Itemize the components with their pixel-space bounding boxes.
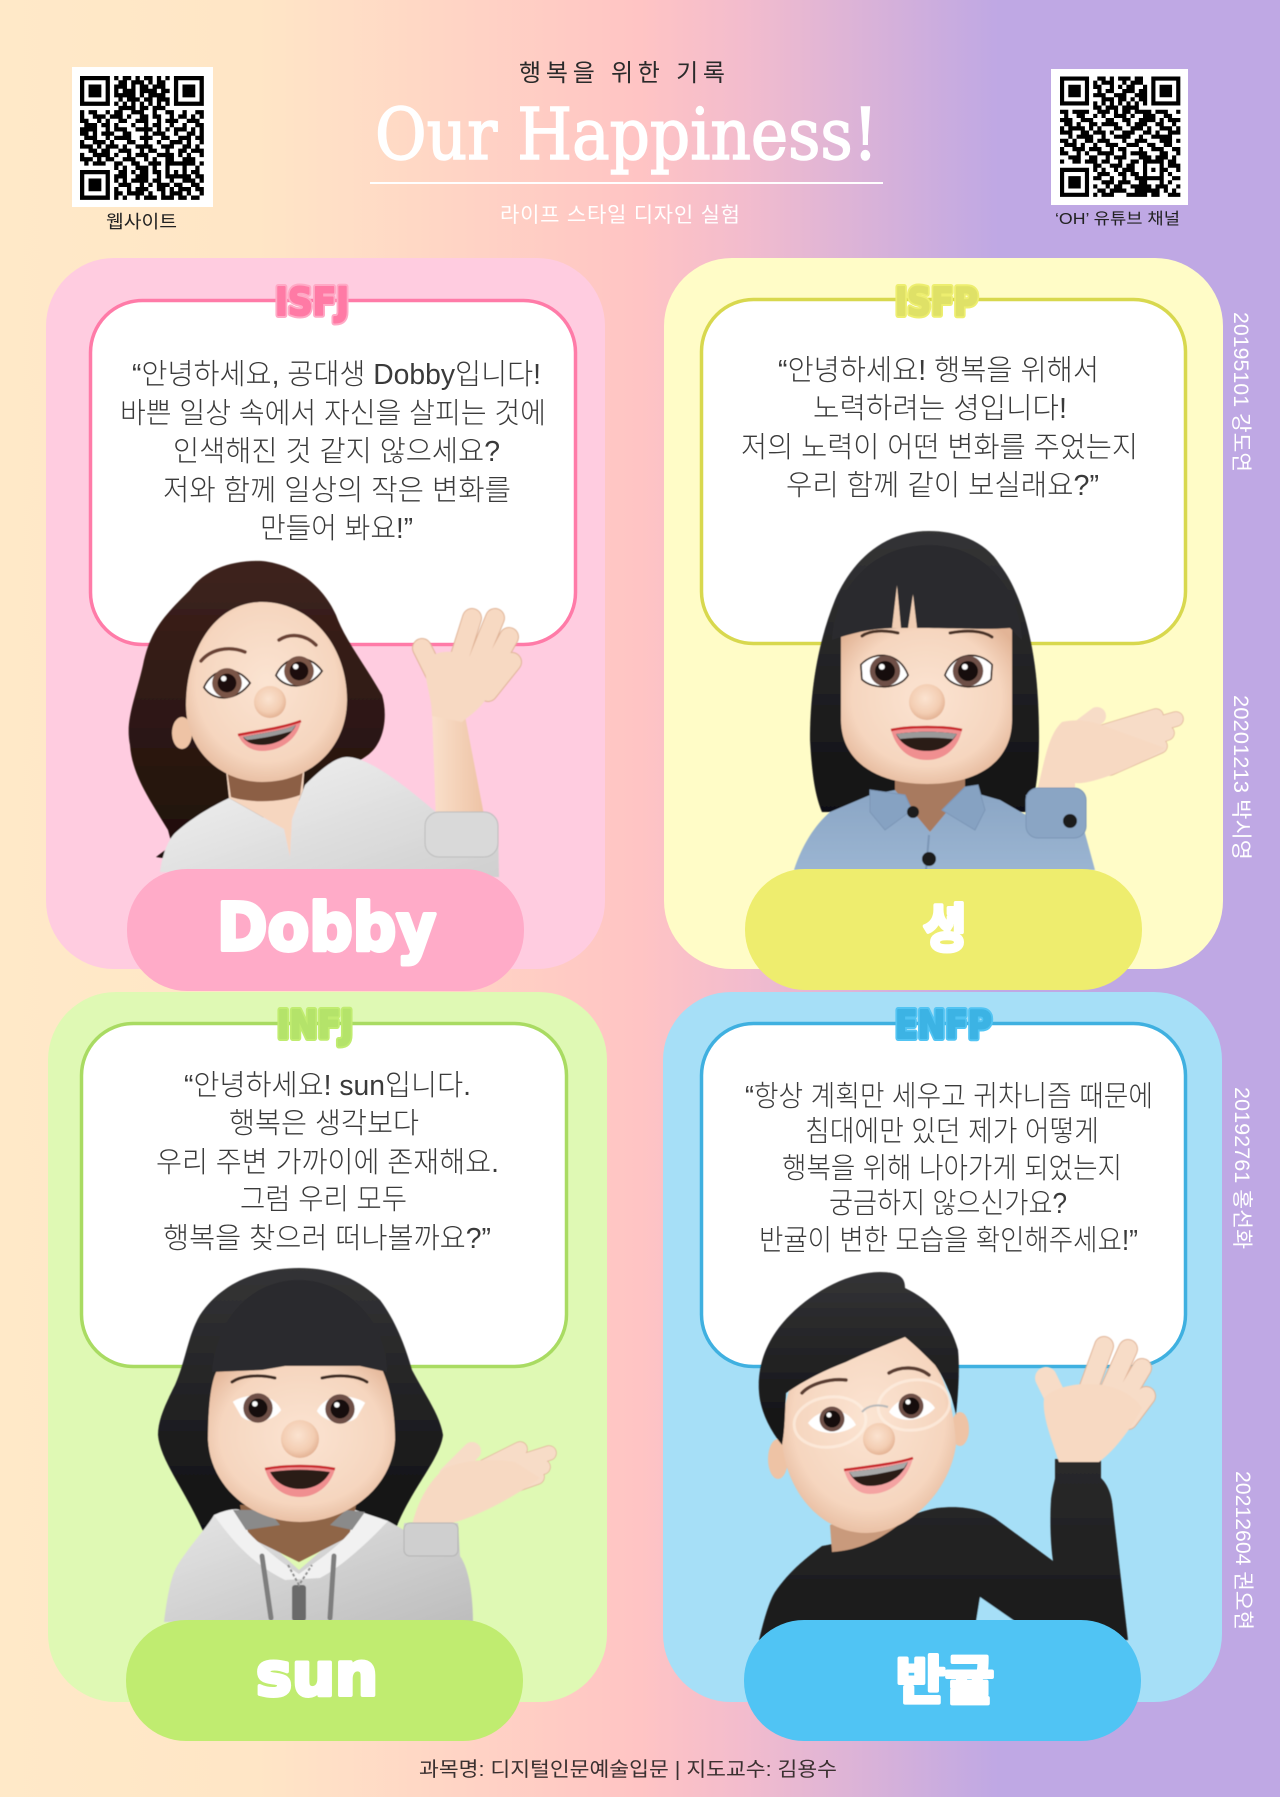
- speech text: 저의 노력이 어떤 변화를 주었는지: [741, 432, 1138, 464]
- panel: ISFP: [664, 258, 1223, 990]
- speech text: 우리 함께 같이 보실래요?”: [786, 470, 1099, 502]
- title underline: [370, 182, 883, 184]
- credit 4: 20212604 권오현: [1231, 1471, 1254, 1630]
- speech text: 우리 주변 가까이에 존재해요.: [156, 1147, 499, 1179]
- speech text: 저와 함께 일상의 작은 변화를: [163, 475, 511, 507]
- card background: [664, 258, 1223, 969]
- panel: ENFP 반귤: [663, 992, 1222, 1741]
- tag ISFJ: ISFJ: [275, 280, 349, 324]
- avatar: sun: [158, 1268, 549, 1622]
- speech text: 반귤이 변한 모습을 확인해주세요!”: [759, 1225, 1138, 1257]
- speech text: 인색해진 것 같지 않으세요?: [173, 436, 500, 468]
- speech text: 행복은 생각보다: [229, 1108, 419, 1140]
- name: Dobby: Dobby: [217, 889, 436, 966]
- card background: [663, 992, 1222, 1702]
- panel: INFJ sun: [48, 992, 607, 1741]
- speech box: [702, 1024, 1186, 1366]
- name pill: [126, 1620, 523, 1741]
- panel: ISFJ Dobby: [46, 258, 605, 991]
- avatar: 반귤: [759, 1272, 1146, 1640]
- name: sun: sun: [256, 1640, 378, 1710]
- speech text: 만들어 봐요!”: [260, 513, 413, 545]
- name pill: [745, 869, 1142, 990]
- tag INFJ: INFJ: [277, 1003, 353, 1047]
- speech text: “안녕하세요! 행복을 위해서: [778, 355, 1099, 387]
- name pill: [744, 1620, 1141, 1741]
- speech text: 궁금하지 않으신가요?: [829, 1188, 1067, 1220]
- header: [72, 60, 1188, 232]
- avatar: 셩: [794, 531, 1176, 870]
- footer: course and professor: 과목명: 디지털인문예술입문 | 지도교수: 김용수: [419, 1758, 837, 1781]
- speech text: 노력하려는 셩입니다!: [813, 393, 1067, 425]
- QR code: YouTube channel: [1051, 69, 1188, 205]
- speech text: “안녕하세요, 공대생 Dobby입니다!: [132, 359, 541, 391]
- QR caption: YouTube: ‘OH’ 유튜브 채널: [1055, 210, 1180, 228]
- speech text: 행복을 찾으러 떠나볼까요?”: [163, 1223, 491, 1255]
- credit 1: 20195101 강도연: [1229, 312, 1252, 472]
- speech text: 행복을 위해 나아가게 되었는지: [782, 1153, 1122, 1185]
- tag ISFP: ISFP: [895, 280, 978, 324]
- name: 셩: 셩: [923, 900, 967, 960]
- team member credits: [1229, 312, 1254, 1630]
- name pill: [127, 869, 524, 991]
- speech text: [120, 359, 546, 545]
- speech text: [745, 1081, 1153, 1257]
- speech box: [90, 300, 576, 644]
- speech text: [156, 1070, 499, 1255]
- tag INFJ: INFJ: [277, 1003, 353, 1047]
- speech box: [702, 300, 1186, 644]
- speech text: “항상 계획만 세우고 귀차니즘 때문에: [745, 1081, 1153, 1113]
- credit 3: 20192761 홍선화: [1230, 1087, 1253, 1249]
- tag ENFP: ENFP: [895, 1003, 992, 1047]
- speech box: [82, 1024, 566, 1366]
- speech text: 침대에만 있던 제가 어떻게: [805, 1116, 1099, 1148]
- card background: [48, 992, 607, 1702]
- tag ISFP: ISFP: [895, 280, 978, 324]
- title: Our Happiness!: [375, 93, 878, 176]
- eyebrow heading: 행복을 위한 기록: [519, 60, 725, 87]
- speech text: 바쁜 일상 속에서 자신을 살피는 것에: [120, 398, 546, 430]
- tag ISFJ: ISFJ: [275, 280, 349, 324]
- speech text: [741, 355, 1138, 502]
- credit 2: 20201213 박시영: [1229, 695, 1252, 860]
- name: 반귤: 반귤: [896, 1652, 994, 1712]
- speech text: 그럼 우리 모두: [240, 1184, 407, 1216]
- QR caption: website: 웹사이트: [106, 212, 177, 232]
- card background: [46, 258, 605, 969]
- avatar: Dobby: [129, 561, 512, 877]
- speech text: “안녕하세요! sun입니다.: [184, 1070, 471, 1102]
- QR code: website: [72, 67, 213, 207]
- subtitle: 라이프 스타일 디자인 실험: [500, 204, 740, 227]
- tag ENFP: ENFP: [895, 1003, 992, 1047]
